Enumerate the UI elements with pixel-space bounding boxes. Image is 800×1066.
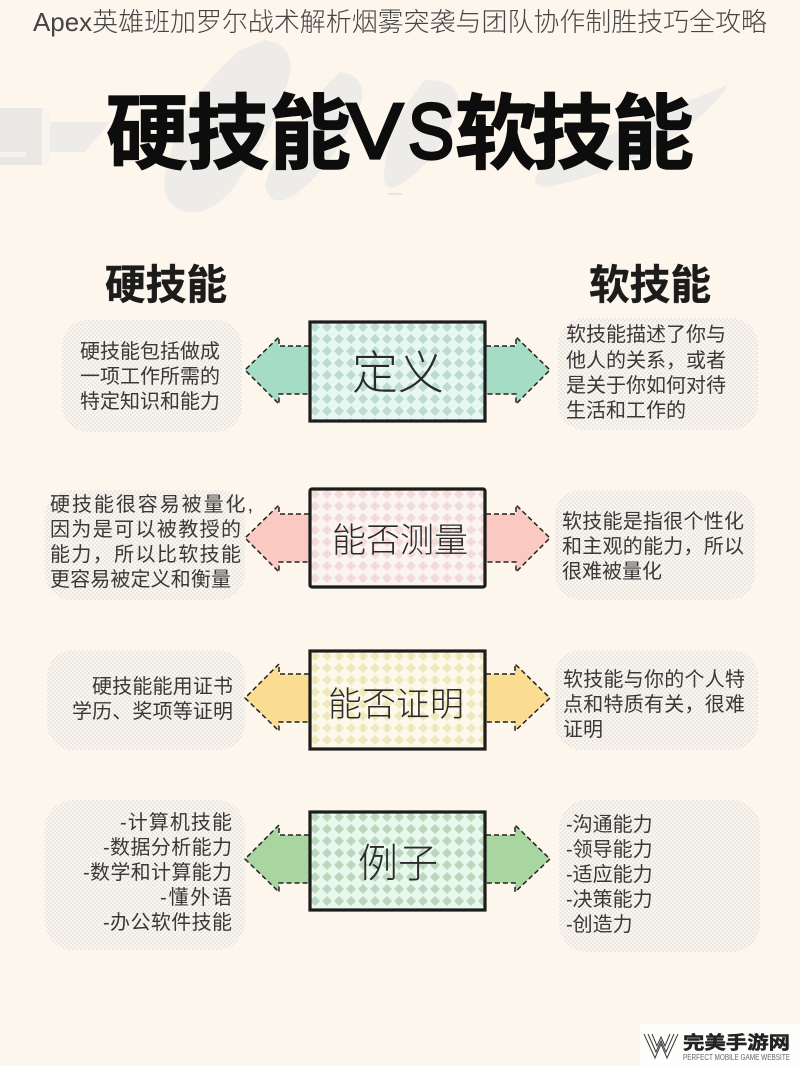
left text panel: provable <box>47 650 245 750</box>
right arrow: measurable <box>486 505 550 572</box>
logo: site watermark <box>640 1024 800 1066</box>
column heading: hard skills: 硬技能 <box>105 262 227 308</box>
center box: definition <box>310 322 485 421</box>
main heading: S <box>408 87 454 175</box>
right text panel: provable: 软技能与你的个人特 <box>563 668 745 691</box>
left text panel: examples: -数据分析能力 <box>103 836 232 859</box>
right text panel: definition: 是关于你如何对待 <box>566 374 726 397</box>
center box: measurable <box>310 489 485 587</box>
logo name: 完美手游网 <box>683 1032 790 1053</box>
right text panel: provable: 证明 <box>563 718 603 741</box>
left arrow: definition <box>245 337 309 404</box>
left text panel: examples <box>45 800 245 950</box>
right text panel: measurable <box>555 490 755 600</box>
right text panel: definition: 他人的关系，或者 <box>566 349 726 372</box>
right text panel: measurable: 和主观的能力，所以 <box>562 535 744 558</box>
right text panel: definition: 生活和工作的 <box>566 399 686 422</box>
left text panel: measurable: 能力，所以比软技能 <box>50 543 241 566</box>
center box: examples: 例子 <box>358 842 438 886</box>
left text panel: measurable <box>45 490 253 600</box>
left text panel: definition: 硬技能包括做成 <box>80 340 220 363</box>
watermark brush strokes <box>0 40 728 212</box>
left text panel: provable: 硬技能能用证书 <box>92 675 233 698</box>
right text panel: examples: -创造力 <box>566 913 633 936</box>
right text panel: provable <box>555 650 758 750</box>
icon: W logo <box>644 1034 678 1058</box>
row: definition <box>62 318 758 432</box>
right text panel: measurable: 软技能是指很个性化 <box>562 510 744 533</box>
right text panel: definition <box>558 318 758 430</box>
row: provable <box>47 650 758 750</box>
row: measurable <box>45 489 755 600</box>
left arrow: provable <box>245 664 309 731</box>
center box: measurable: 能否测量 <box>332 522 468 560</box>
left text panel: definition: 一项工作所需的 <box>80 365 220 388</box>
left text panel: provable: 学历、奖项等证明 <box>72 700 233 723</box>
right text panel: examples: -沟通能力 <box>566 813 653 836</box>
right text panel: examples: -适应能力 <box>566 863 653 886</box>
left text panel: measurable: 硬技能很容易被量化, <box>50 493 253 516</box>
column heading: soft skills: 软技能 <box>589 262 711 308</box>
right arrow: provable <box>486 664 550 731</box>
right arrow: examples <box>486 825 550 892</box>
main heading: 软技能 <box>455 89 694 180</box>
main heading <box>106 87 694 180</box>
center box: provable <box>310 651 485 749</box>
left text panel: measurable: 因为是可以被教授的 <box>50 518 241 541</box>
right text panel: definition: 软技能描述了你与 <box>566 323 726 346</box>
left text panel: measurable: 更容易被定义和衡量 <box>50 568 231 591</box>
main heading: 硬技能 <box>106 89 351 180</box>
page title: Apex英雄班加罗尔战术解析烟雾突袭与团队协作制胜技巧全攻略 <box>33 7 767 37</box>
center box: definition: 定义 <box>352 347 444 399</box>
left text panel: definition: 特定知识和能力 <box>80 390 220 413</box>
right text panel: provable: 点和特质有关，很难 <box>563 693 745 716</box>
left text panel: examples: -计算机技能 <box>120 811 232 834</box>
left arrow: measurable <box>245 505 309 572</box>
left text panel: examples: -数学和计算能力 <box>83 861 232 884</box>
row: examples <box>45 800 760 952</box>
left text panel: definition <box>62 320 242 432</box>
left text panel: examples: -懂外语 <box>160 886 232 909</box>
left text panel: examples: -办公软件技能 <box>103 911 232 934</box>
main heading: V <box>347 87 403 175</box>
center box: examples <box>310 812 485 910</box>
right text panel: examples <box>559 800 760 952</box>
left arrow: examples <box>245 825 309 892</box>
right text panel: examples: -领导能力 <box>566 838 653 861</box>
right arrow: definition <box>486 337 550 404</box>
right text panel: examples: -决策能力 <box>566 888 653 911</box>
right text panel: measurable: 很难被量化 <box>562 560 662 583</box>
center box: provable: 能否证明 <box>328 686 464 724</box>
